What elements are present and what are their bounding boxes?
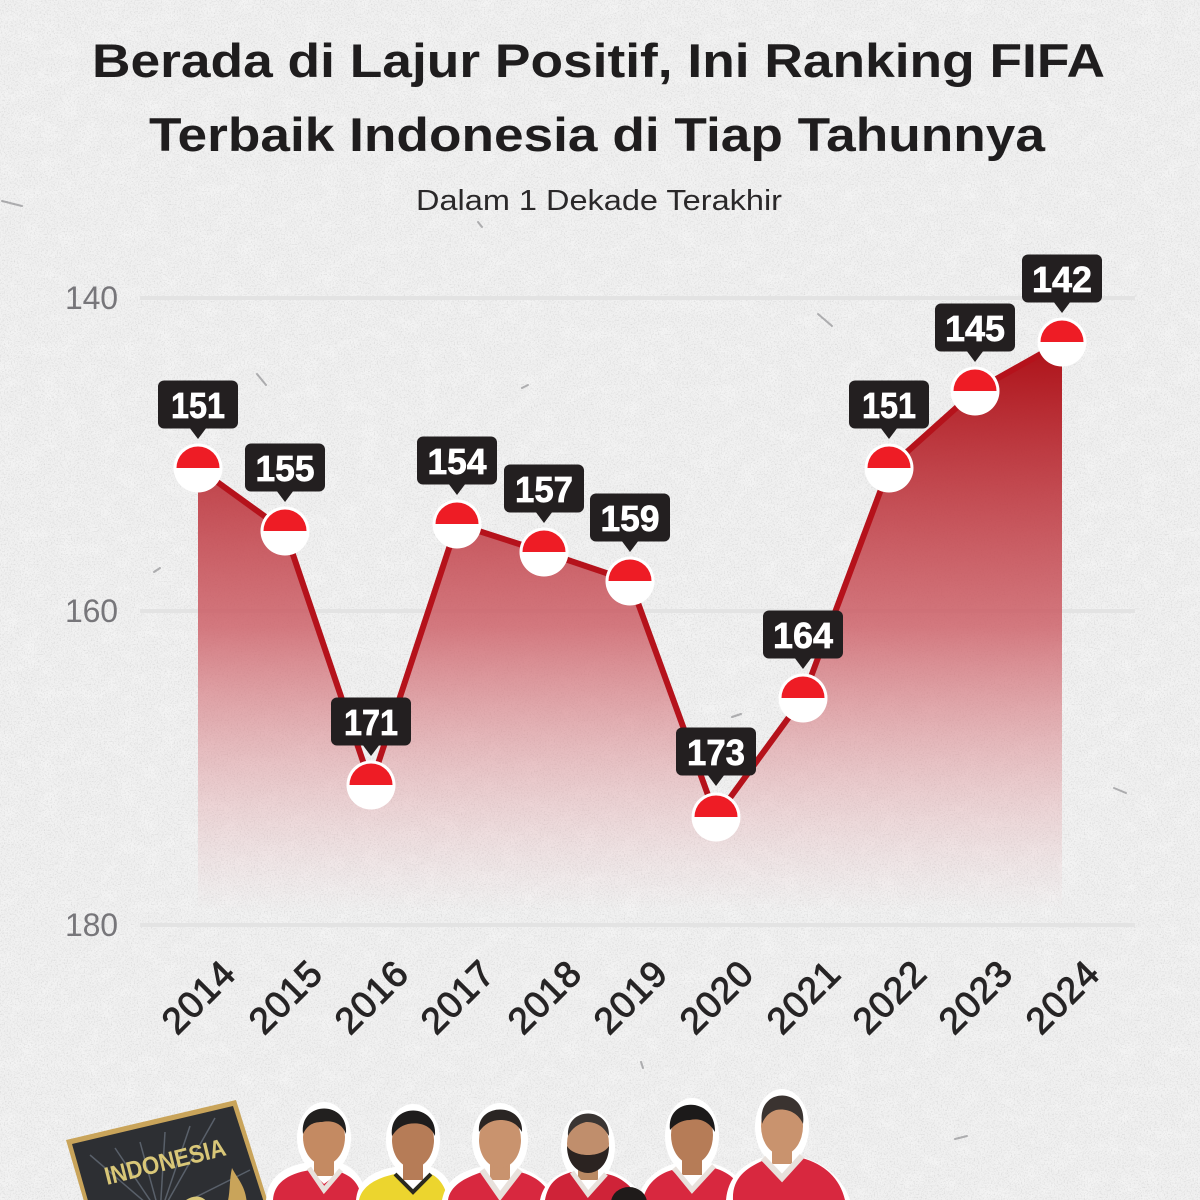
player 2: goalkeeper <box>356 1104 454 1200</box>
x axis year labels: 2015 <box>241 953 330 1042</box>
point 2018: 157 <box>504 464 584 576</box>
player 4 <box>540 1110 644 1200</box>
x axis year labels: 2019 <box>586 953 675 1042</box>
point 2023: 145: 145 <box>945 308 1005 349</box>
point 2019: 159: 159 <box>600 498 660 539</box>
y axis with grid lines: 160 <box>65 593 118 629</box>
point 2015: 155 <box>245 444 325 556</box>
point 2016: 171: 171 <box>344 702 398 743</box>
gradient area under line <box>198 342 1062 912</box>
x axis year labels <box>154 953 1107 1042</box>
x axis year labels: 2024 <box>1018 953 1107 1042</box>
point 2020: 173: 173 <box>687 732 745 773</box>
point 2018: 157: 157 <box>515 469 573 510</box>
point 2014: 151: 151 <box>171 385 225 426</box>
y axis with grid lines: 180 <box>65 907 118 943</box>
point 2024: 142 <box>1022 254 1102 366</box>
x axis year labels: 2023 <box>931 953 1020 1042</box>
data points and value labels <box>158 254 1102 842</box>
point 2019: 159 <box>590 494 670 606</box>
point 2023: 145 <box>935 304 1015 416</box>
point 2022: 151: 151 <box>862 385 916 426</box>
x axis year labels: 2017 <box>413 953 502 1042</box>
x axis year labels: 2016 <box>327 953 416 1042</box>
player 5 <box>638 1098 750 1200</box>
x axis year labels: 2021 <box>759 953 848 1042</box>
y axis with grid lines: 140 <box>65 280 118 316</box>
point 2015: 155: 155 <box>256 448 314 489</box>
title <box>92 34 1105 161</box>
line chart: ranking per year <box>158 254 1102 912</box>
subtitle: Dalam 1 Dekade Terakhir <box>416 185 782 217</box>
point 2021: 164: 164 <box>773 615 833 656</box>
icon: Indonesia team badge <box>66 1100 272 1200</box>
x axis year labels: 2022 <box>845 953 934 1042</box>
title: Berada di Lajur Positif, Ini Ranking FIFA <box>92 34 1105 87</box>
point 2024: 142: 142 <box>1032 259 1092 300</box>
x axis year labels: 2014 <box>154 953 243 1042</box>
point 2021: 164 <box>763 610 843 722</box>
team players group <box>266 1089 850 1200</box>
icon: Indonesia team badge: INDONESIA <box>102 1134 229 1191</box>
y axis with grid lines <box>65 280 1135 943</box>
x axis year labels: 2020 <box>672 953 761 1042</box>
front player head <box>611 1187 647 1200</box>
ranking line <box>198 342 1062 817</box>
title: Terbaik Indonesia di Tiap Tahunnya <box>149 108 1046 161</box>
player 6 <box>726 1089 850 1200</box>
point 2014: 151 <box>158 380 238 492</box>
point 2020: 173 <box>676 728 756 842</box>
point 2016: 171 <box>331 698 411 810</box>
player 3 <box>442 1103 556 1200</box>
point 2022: 151 <box>849 380 929 492</box>
point 2017: 154: 154 <box>428 441 486 482</box>
player 1 <box>266 1102 366 1200</box>
point 2017: 154 <box>417 436 497 548</box>
x axis year labels: 2018 <box>500 953 589 1042</box>
